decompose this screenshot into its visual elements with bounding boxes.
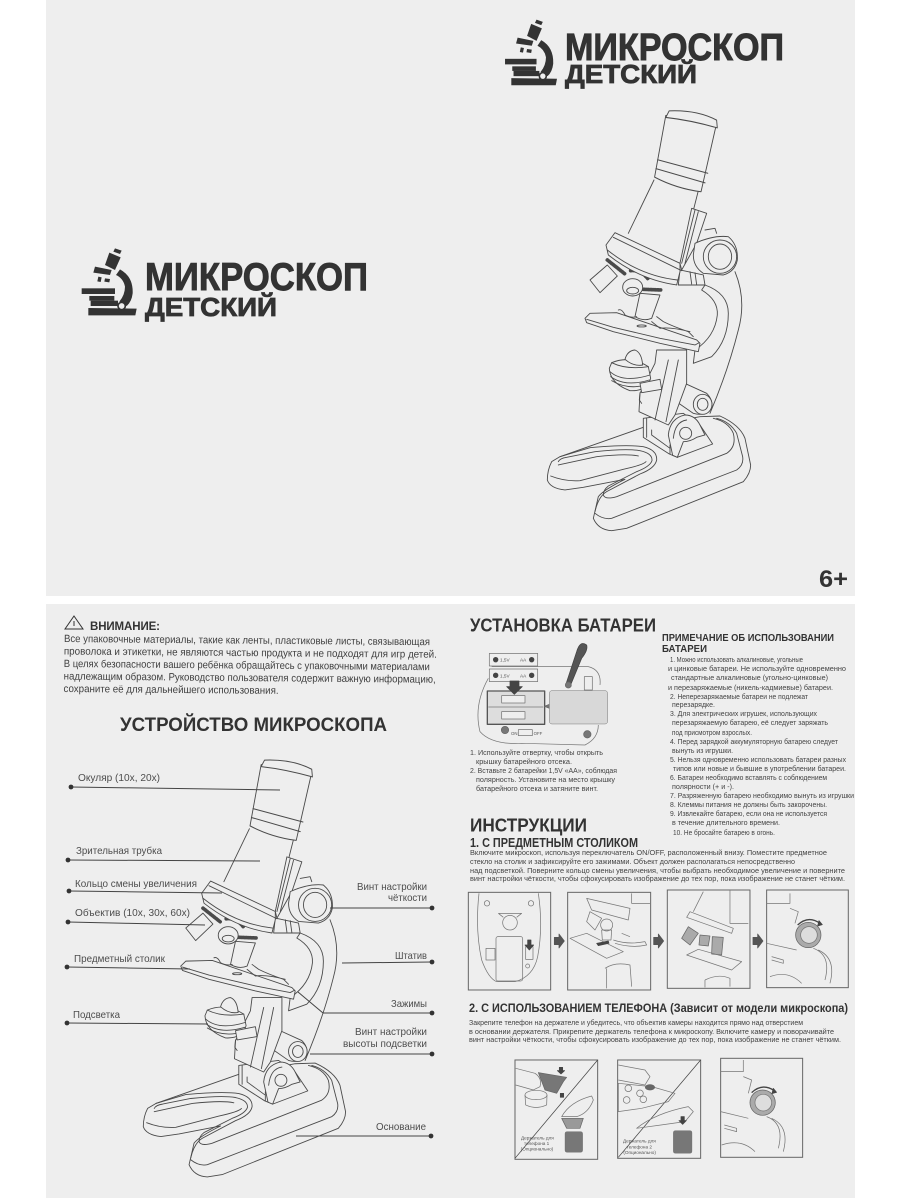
battery note list: 7. Разряженную батарею необходимо вынуть из игрушки [670, 791, 854, 800]
battery note list: типов или новые и бывшие в употреблении батареи. [673, 764, 846, 773]
left logo: ДЕТСКИЙ [145, 292, 277, 322]
battery note list: вынуть из игрушки. [672, 746, 733, 755]
age mark: 6+ [819, 566, 848, 593]
label: focus knob: Винт настройки [357, 881, 427, 893]
phone holder 1: (Опционально) [521, 1147, 554, 1152]
label: magnification ring [67, 878, 222, 893]
battery note list: и цинковые батареи. Не используйте одновременно [668, 664, 846, 673]
warning text: В целях безопасности вашего ребёнка обращайтесь с упаковочными материалами [64, 658, 430, 673]
phone holder 1 [515, 1060, 598, 1159]
battery note list: и перезаряжаемые (никель-кадмиевые) батареи. [668, 683, 833, 692]
cover microscope illustration [547, 111, 751, 531]
step 2: place slide [568, 892, 651, 990]
label: illumination: Подсветка [73, 1009, 120, 1021]
stage instructions text [470, 848, 845, 883]
warning block [64, 616, 437, 698]
subheading: with phone: 2. С ИСПОЛЬЗОВАНИЕМ ТЕЛЕФОНА (Зависит от модели микроскопа) [469, 1001, 848, 1015]
battery steps: батарейного отсека и затяните винт. [476, 784, 598, 793]
phone images row [515, 1058, 803, 1159]
warning text [64, 633, 437, 698]
phone holder 2 [618, 1060, 701, 1158]
warning heading: ВНИМАНИЕ: [90, 621, 160, 633]
battery note list: 3. Для электрических игрушек, использующих [670, 709, 817, 718]
arrow [654, 934, 664, 948]
arrow [554, 934, 564, 948]
icon: warning triangle [65, 616, 83, 629]
phone holder 1: Держатель для [521, 1135, 554, 1140]
arrow [753, 934, 763, 948]
battery note list: 6. Батареи необходимо вставлять с соблюдением [670, 773, 827, 782]
battery note list: 4. Перед зарядкой аккумуляторную батарею следует [670, 737, 838, 746]
battery note list: 8. Клеммы питания не должны быть закорочены. [670, 800, 827, 809]
label: eyepiece: Окуляр (10x, 20x) [78, 772, 160, 784]
label: stage: Предметный столик [74, 953, 165, 965]
top logo: ДЕТСКИЙ [565, 59, 697, 89]
battery note list: перезаряжаемую батарею, её следует заряжать [672, 718, 828, 727]
label: illumination height knob: Винт настройки [355, 1026, 427, 1038]
battery note list: 10. Не бросайте батарею в огонь. [673, 828, 775, 837]
label: base: Основание [376, 1121, 426, 1133]
label: arm [342, 950, 434, 964]
warning text: сохраните её для дальнейшего использования. [64, 683, 279, 697]
battery note list: 5. Нельзя одновременно использовать батареи разных [670, 755, 846, 764]
battery steps: полярность. Установите на место крышку [476, 775, 615, 784]
phone holder 1: телефона 1 [524, 1141, 550, 1146]
battery note list: 2. Неперезаряжаемые батареи не подлежат [670, 692, 808, 701]
label: magnification ring: Кольцо смены увеличения [75, 878, 197, 890]
warning text: проволока и этикетки, не являются частью продукта и не подходят для игр детей. [64, 645, 437, 661]
battery steps: крышку батарейного отсека. [476, 757, 572, 766]
left logo: МИКРОСКОП [145, 256, 368, 299]
battery diagram: AA [520, 673, 527, 678]
label: focus knob [330, 881, 434, 910]
heading: battery installation: УСТАНОВКА БАТАРЕИ [470, 614, 656, 636]
battery note list [668, 655, 854, 837]
stage instructions text: Включите микроскоп, используя переключатель ON/OFF, расположенный внизу. Поместите предметное [470, 848, 827, 857]
labelled microscope diagram [65, 760, 434, 1177]
battery steps: 2. Вставьте 2 батарейки 1,5V «AA», соблюдая [470, 766, 617, 775]
phone instructions text [469, 1018, 841, 1044]
battery diagram [478, 643, 608, 745]
stage instructions text: стекло на столик и зафиксируйте его зажимами. Объект должен располагаться непосредственно [470, 857, 795, 866]
top logo: МИКРОСКОП [565, 27, 784, 69]
battery diagram: OFF [534, 731, 543, 736]
panel: manual page [46, 604, 855, 1198]
panel: top cover [46, 0, 855, 596]
label: eyepiece [69, 772, 280, 790]
heading: microscope structure: УСТРОЙСТВО МИКРОСКОПА [120, 712, 387, 736]
phone instructions text: винт настройки чёткости, чтобы сфокусировать изображение до тех пор, пока изображение не станет чётким. [469, 1035, 841, 1044]
battery note list: 1. Можно использовать алкалиновые, угольные [670, 655, 803, 664]
focus adjust [721, 1058, 803, 1157]
subheading: with stage: 1. С ПРЕДМЕТНЫМ СТОЛИКОМ [470, 835, 638, 850]
label: illumination height knob: высоты подсветки [343, 1038, 427, 1050]
label: viewing tube: Зрительная трубка [76, 845, 162, 857]
stage instructions text: над подсветкой. Поверните кольцо смены увеличения, чтобы выбрать необходимое увеличение и поверните [470, 866, 845, 875]
battery note list: в течение длительного времени. [672, 818, 780, 827]
phone holder 2: телефона 2 [627, 1144, 652, 1149]
battery diagram: 1,5V [500, 673, 510, 678]
step 1: switch on [468, 892, 551, 990]
battery steps [470, 748, 617, 793]
label: clips [298, 992, 434, 1015]
battery diagram: ON [511, 731, 517, 736]
phone holder 2: (Опционально) [623, 1150, 656, 1155]
step images row [468, 890, 848, 990]
battery note list: полярности (+ и -). [672, 782, 734, 791]
phone instructions text: Закрепите телефон на держателе и убедитесь, что объектив камеры находится прямо над отверстием [469, 1018, 803, 1027]
battery note list: под присмотром взрослых. [672, 728, 752, 737]
label: base [296, 1121, 433, 1138]
battery note list: стандартные алкалиновые (угольно-цинковые) [671, 673, 828, 682]
warning text: Все упаковочные материалы, такие как ленты, пластиковые листы, связывающая [64, 633, 430, 648]
battery note heading: ПРИМЕЧАНИЕ ОБ ИСПОЛЬЗОВАНИИ [662, 632, 834, 644]
battery note list: 9. Извлекайте батарею, если она не используется [670, 809, 827, 818]
label: arm: Штатив [395, 950, 427, 962]
label: illumination [65, 1009, 208, 1025]
battery steps: 1. Используйте отвертку, чтобы открыть [470, 748, 603, 757]
top logo [505, 20, 784, 89]
label: focus knob: чёткости [388, 892, 427, 904]
battery note heading [662, 632, 834, 655]
stage instructions text: винт настройки чёткости, чтобы сфокусировать изображение до тех пор, пока изображение не станет чётким. [470, 874, 845, 883]
label: illumination height knob [310, 1026, 434, 1056]
battery diagram: 1,5V [500, 658, 510, 663]
label: stage [65, 953, 190, 969]
label: objectives [66, 907, 205, 925]
phone holder 2: Держатель для [623, 1139, 656, 1144]
label: clips: Зажимы [391, 998, 427, 1010]
battery diagram: AA [520, 658, 527, 663]
battery note heading: БАТАРЕИ [662, 643, 707, 655]
label: viewing tube [66, 845, 260, 862]
left logo [82, 248, 368, 322]
heading: instructions: ИНСТРУКЦИИ [470, 814, 587, 836]
phone instructions text: в основании держателя. Прикрепите держатель телефона к микроскопу. Включите камеру и поворачивайте [469, 1027, 834, 1036]
label: objectives: Объектив (10x, 30x, 60x) [75, 907, 190, 919]
step 4: focus knob [767, 890, 848, 988]
battery note list: перезарядке. [672, 700, 715, 709]
warning text: надлежащим образом. Руководство пользователя содержит важную информацию, [64, 670, 436, 686]
step 3: choose objective [667, 890, 750, 988]
